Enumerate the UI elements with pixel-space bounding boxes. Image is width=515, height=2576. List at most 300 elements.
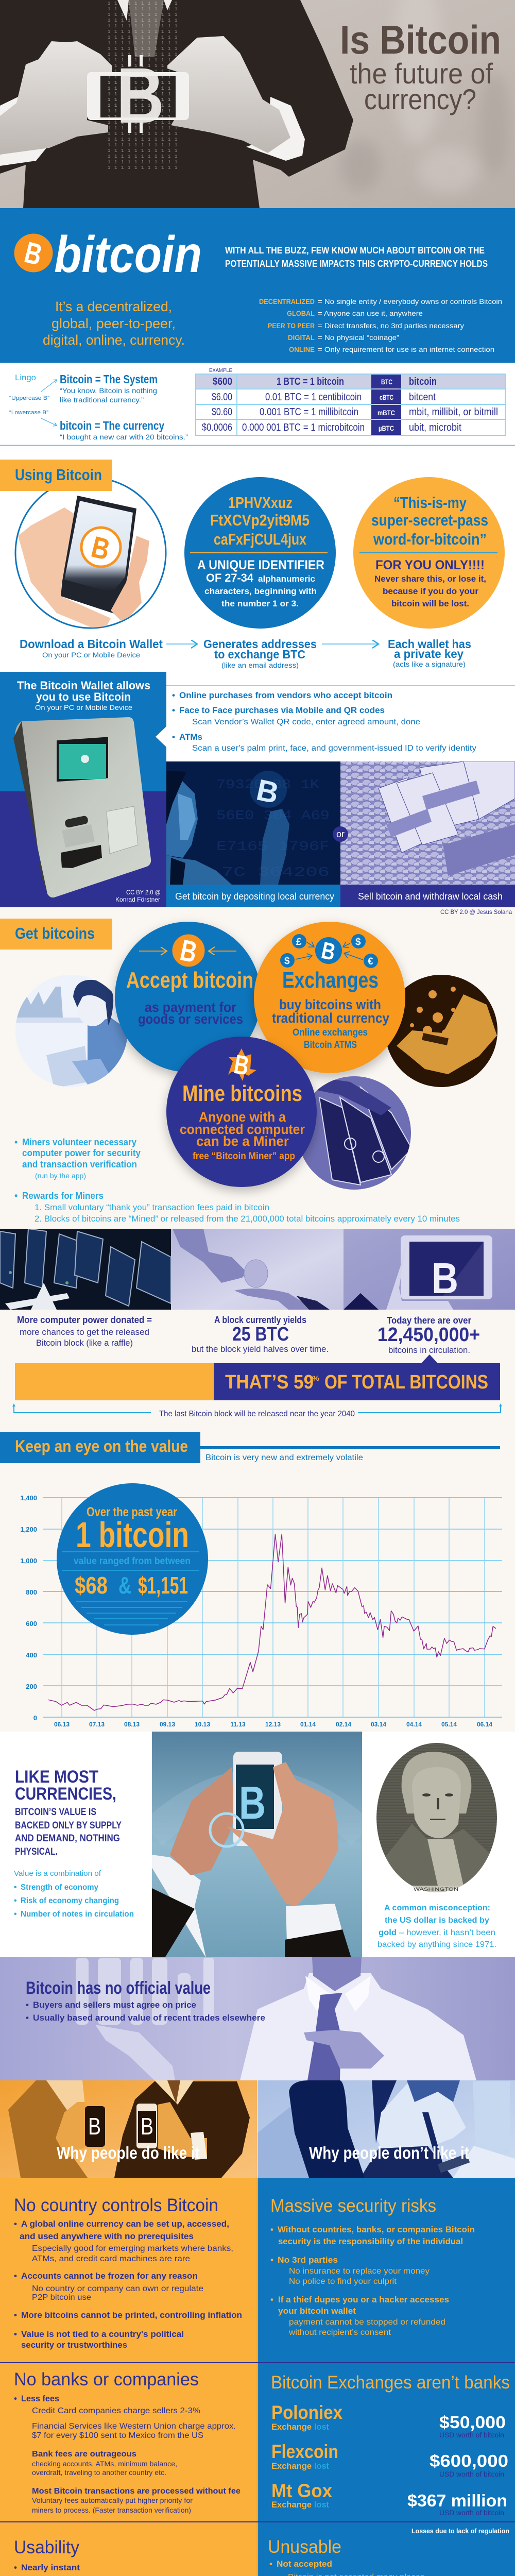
- section heading: get bitcoins: [0, 919, 112, 950]
- photo: tablet with bitcoin: [344, 1229, 515, 1310]
- caption: withdraw: Sell bitcoin and withdraw local cash: [358, 891, 503, 902]
- line chart: bitcoin value: [20, 1494, 502, 1728]
- pro: no banks or companies: checking accounts, ATMs, minimum balance,: [32, 2460, 177, 2468]
- pro: no country controls bitcoin: P2P bitcoin use: [32, 2293, 91, 2302]
- pro: usability: Nearly instant: [21, 2563, 80, 2572]
- section heading: using bitcoin: [0, 460, 112, 491]
- con: massive security risks: If a thief dupes you or a hacker accesses: [278, 2295, 449, 2304]
- x axis labels: 02.14: [336, 1721, 351, 1728]
- definitions list: ONLINE: [289, 345, 315, 353]
- callout: value range circle: &: [118, 1572, 131, 1599]
- icon: bitcoin ATM: [13, 717, 151, 897]
- step: download wallet: [20, 637, 163, 659]
- y axis labels: 1,400: [20, 1494, 37, 1502]
- y axis labels: 1,000: [20, 1557, 37, 1565]
- con: unusable: Not accepted: [277, 2559, 332, 2569]
- icon: binary stream: [106, 0, 178, 170]
- pro: no banks or companies: [14, 2369, 241, 2514]
- step: generates addresses: [203, 637, 317, 669]
- circle text: accept bitcoin: [126, 934, 253, 1027]
- credit: ATM photo: CC BY 2.0 @: [126, 889, 161, 896]
- pro: no banks or companies: Financial Services like Western Union charge approx.: [32, 2422, 236, 2431]
- list: miners: 1. Small voluntary “thank you” transaction fees paid in bitcoin: [35, 1202, 269, 1212]
- x axis labels: 09.13: [160, 1721, 175, 1728]
- uppercase definition: [60, 372, 158, 404]
- pro: no country controls bitcoin: A global online currency can be set up, accessed,: [21, 2219, 229, 2229]
- credit: photos: CC BY 2.0 @ Jesus Solana: [440, 908, 512, 916]
- con: exchanges are not banks: lost: [314, 2422, 329, 2432]
- photo: hands with phone: [152, 1732, 362, 1958]
- pro: no banks or companies: $7 for every $100 sent to Mexico from the US: [32, 2431, 203, 2440]
- progress bar: 59 percent: %: [312, 1374, 320, 1382]
- text: computer power: more chances to get the released: [20, 1327, 149, 1337]
- con: massive security risks: •: [270, 2295, 273, 2304]
- list: no official value: Usually based around value of recent trades elsewhere: [33, 2013, 265, 2023]
- pro: no banks or companies: •: [14, 2394, 17, 2403]
- list: value factors: •: [14, 1883, 17, 1892]
- text: block yield: but the block yield halves over time.: [192, 1344, 329, 1354]
- con: massive security risks: No insurance to replace your money: [289, 2267, 430, 2276]
- panel: using bitcoin: [0, 460, 505, 669]
- circle text: exchanges: $: [284, 956, 290, 967]
- con: massive security risks: Without countries, banks, or companies Bitcoin: [278, 2225, 475, 2234]
- table: bitcoin denominations: 0.01 BTC = 1 centibitcoin: [265, 392, 362, 403]
- circle text: exchanges: Online exchanges: [293, 1027, 368, 1038]
- circle text: accept bitcoin: Accept bitcoin: [126, 968, 253, 993]
- photo: hand and coin: [171, 1229, 344, 1310]
- pro: no banks or companies: Bank fees are outrageous: [32, 2450, 136, 2459]
- y axis labels: 1,200: [20, 1526, 37, 1533]
- wallet heading: [17, 679, 150, 711]
- lowercase definition: bitcoin = The currency: [60, 419, 164, 432]
- list: no official value: Buyers and sellers must agree on price: [33, 2000, 196, 2010]
- callout: value range circle: $1,151: [138, 1572, 188, 1599]
- x axis labels: 08.13: [124, 1721, 140, 1728]
- definitions list: = No physical “coinage”: [318, 333, 399, 342]
- circle: private key: super-secret-pass: [371, 511, 488, 529]
- icon: shirt and tie: [117, 0, 172, 57]
- circle: private key: because if you do your: [383, 586, 478, 596]
- x axis labels: 11.13: [230, 1721, 246, 1728]
- icon: bitcoin logo: bitcoin: [54, 226, 202, 283]
- callout: value range circle: [57, 1483, 208, 1635]
- or badge: or: [336, 829, 345, 839]
- list: ways to use wallet: Face to Face purchases via Mobile and QR codes: [179, 705, 385, 715]
- con: exchanges are not banks: Exchange: [271, 2461, 312, 2471]
- con: massive security risks: Massive security risks: [270, 2196, 436, 2216]
- section heading: keep an eye on the value: [0, 1432, 500, 1463]
- y axis labels: 800: [26, 1588, 37, 1596]
- text: block yield: A block currently yields: [214, 1315, 306, 1325]
- text: dollar misconception: backed by anything since 1971.: [377, 1940, 496, 1949]
- list: value factors: Value is a combination of: [14, 1869, 101, 1878]
- icon: left hand: [0, 41, 112, 155]
- panel: hero photo and title: [0, 0, 515, 208]
- list: value factors: •: [14, 1910, 17, 1919]
- con: exchanges are not banks: $600,000: [430, 2451, 508, 2470]
- table: bitcoin denominations: $600: [213, 376, 232, 387]
- list: value factors: •: [14, 1896, 17, 1905]
- list: miners: •: [14, 1191, 18, 1201]
- definition tagline: It’s a decentralized,: [55, 299, 172, 314]
- circle text: mine bitcoins: can be a Miner: [196, 1133, 289, 1149]
- list: ways to use wallet: Online purchases from vendors who accept bitcoin: [179, 690, 392, 700]
- con: unusable: •: [269, 2559, 272, 2569]
- credit: ATM photo: [115, 889, 161, 903]
- table: bitcoin denominations: cBTC: [380, 393, 393, 401]
- bracket: last block: The last Bitcoin block will be released near the year 2040: [159, 1410, 355, 1418]
- list: ways to use wallet: Scan Vendor’s Wallet QR code, enter agreed amount, done: [192, 718, 420, 726]
- heading: like most currencies: LIKE MOST: [15, 1767, 98, 1787]
- con: exchanges are not banks: Poloniex: [271, 2402, 342, 2423]
- circle text: mine bitcoins: connected computer: [180, 1122, 305, 1137]
- case labels: “Lowercase B”: [9, 410, 48, 416]
- circle: address identifier: [184, 477, 336, 629]
- intro statement: [225, 245, 488, 269]
- lowercase definition: [60, 419, 188, 441]
- icon: phone with bitcoin symbol: [87, 52, 189, 140]
- con: massive security risks: No police to find your culprit: [289, 2277, 397, 2286]
- panel: blue introduction: [0, 208, 515, 363]
- circle: address identifier: A UNIQUE IDENTIFIER: [197, 558, 324, 572]
- heading: like most currencies: BACKED ONLY BY SUPPLY: [15, 1820, 122, 1831]
- circle: private key: FOR YOU ONLY!!!!: [375, 558, 485, 572]
- con: exchanges are not banks: USD worth of bitcoin: [439, 2470, 504, 2478]
- photo: hands with phone: B: [239, 1777, 266, 1829]
- list: value factors: [14, 1869, 134, 1919]
- title: [340, 17, 501, 115]
- text: dollar misconception: – however, it hasn’t been: [399, 1928, 495, 1937]
- icon: shirt cuffs: [0, 97, 305, 166]
- con: exchanges are not banks: USD worth of bitcoin: [439, 2509, 504, 2517]
- circle: private key: bitcoin will be lost.: [391, 599, 469, 608]
- table: bitcoin denominations: $0.0006: [202, 422, 232, 433]
- icon: right hand: [167, 36, 290, 153]
- circle: mine bitcoins: [166, 1037, 317, 1187]
- wallet heading: you to use Bitcoin: [36, 690, 131, 703]
- con: exchanges are not banks: Exchange: [271, 2500, 312, 2510]
- definitions list: = Direct transfers, no 3rd parties necessary: [318, 321, 464, 330]
- pro: no country controls bitcoin: More bitcoins cannot be printed, controlling inflation: [21, 2310, 242, 2320]
- pro: no banks or companies: Most Bitcoin transactions are processed without fee: [32, 2487, 241, 2496]
- text: dollar misconception: gold: [379, 1928, 397, 1937]
- circle text: exchanges: traditional currency: [272, 1010, 389, 1026]
- heading: no official value: Bitcoin has no official value: [26, 1978, 211, 1998]
- circle: address identifier: OF 27-34: [206, 571, 254, 584]
- arrow: lowercase: [41, 418, 57, 426]
- text: block yield: 25 BTC: [232, 1324, 289, 1345]
- x axis labels: 06.13: [54, 1721, 70, 1728]
- definitions list: = Anyone can use it, anywhere: [318, 309, 423, 317]
- icon: phone in hand circle: [15, 478, 166, 628]
- panel: lingo: [0, 368, 515, 445]
- list: ways to use wallet: ATMs: [179, 732, 202, 742]
- definition tagline: global, peer-to-peer,: [52, 316, 176, 331]
- pro: no country controls bitcoin: security or trustworthines: [21, 2340, 127, 2350]
- table: bitcoin denominations: EXAMPLE: [209, 368, 232, 374]
- definitions list: GLOBAL: [287, 309, 315, 317]
- lowercase definition: “I bought a new car with 20 bitcoins.”: [60, 433, 188, 441]
- progress bar: 59 percent: [15, 1354, 500, 1400]
- text: computer power: Bitcoin block (like a raffle): [36, 1338, 133, 1348]
- pro: no country controls bitcoin: Especially good for emerging markets where banks,: [32, 2244, 233, 2253]
- panel: bitcoin wallet and ATM: [0, 672, 515, 907]
- list: miners: 2. Blocks of bitcoins are “Mined” or released from the 21,000,000 total bitcoins approximately every 10 minutes: [35, 1214, 460, 1224]
- circle text: exchanges: Exchanges: [282, 968, 379, 993]
- title: currency?: [364, 83, 476, 115]
- con: massive security risks: [270, 2196, 475, 2337]
- pro: no country controls bitcoin: and used anywhere with no prerequisites: [20, 2231, 194, 2241]
- photo: bitcoins and banknotes: [340, 761, 515, 885]
- photo: man with glowing bitcoin: 56E0 304 A69: [216, 808, 330, 823]
- circle: private key: [353, 477, 505, 629]
- circle text: accept bitcoin: B: [177, 934, 200, 970]
- circle: private key: Never share this, or lose it,: [374, 574, 486, 584]
- intro statement: WITH ALL THE BUZZ, FEW KNOW MUCH ABOUT BITCOIN OR THE: [225, 245, 485, 256]
- uppercase definition: like traditional currency.”: [60, 396, 144, 404]
- photo: why people do like it: [0, 2080, 257, 2178]
- step: download wallet: On your PC or Mobile Device: [42, 651, 140, 659]
- pro: no country controls bitcoin: •: [14, 2219, 17, 2229]
- photo: mining servers: [0, 1229, 171, 1310]
- table: bitcoin denominations: bitcoin: [409, 376, 437, 387]
- text: block yield: [192, 1315, 329, 1354]
- photo: why people do like it: B: [88, 2113, 101, 2140]
- step: download wallet: Download a Bitcoin Wallet: [20, 637, 163, 651]
- pro: no banks or companies: Less fees: [21, 2394, 59, 2403]
- step: generates addresses: to exchange BTC: [214, 648, 305, 661]
- table: bitcoin denominations: $0.60: [212, 406, 232, 418]
- con: exchanges are not banks: Exchange: [271, 2422, 312, 2432]
- pro: no country controls bitcoin: Value is not tied to a country's political: [21, 2329, 184, 2339]
- text: bitcoins in circulation: 12,450,000+: [377, 1324, 480, 1346]
- circle text: exchanges: B: [319, 937, 338, 965]
- con: unusable: Unusable: [268, 2537, 341, 2557]
- or badge: [333, 826, 348, 842]
- con: exchanges are not banks: Mt Gox: [271, 2480, 332, 2501]
- list: miners: [14, 1137, 460, 1224]
- pro: no country controls bitcoin: •: [14, 2310, 17, 2320]
- circle text: exchanges: £: [296, 937, 302, 947]
- con: massive security risks: security is the responsibility of the individual: [278, 2236, 463, 2246]
- photo: why people do not like it: [258, 2080, 515, 2178]
- wallet heading: On your PC or Mobile Device: [35, 703, 132, 711]
- table: bitcoin denominations: $6.00: [212, 392, 232, 403]
- caption: deposit: Get bitcoin by depositing local currency: [175, 891, 334, 902]
- y axis labels: 600: [26, 1620, 37, 1628]
- x axis labels: 12.13: [265, 1721, 281, 1728]
- progress bar: 59 percent: THAT’S 59: [225, 1371, 314, 1393]
- table: bitcoin denominations: mBTC: [377, 409, 395, 417]
- circle text: accept bitcoin: as payment for: [145, 999, 236, 1015]
- list: no official value: [26, 2000, 265, 2023]
- pro: no banks or companies: Credit Card companies charge sellers 2-3%: [32, 2406, 200, 2415]
- definitions list: [259, 297, 502, 353]
- circle: accept bitcoin: [115, 922, 261, 1072]
- x axis labels: 10.13: [195, 1721, 210, 1728]
- photo: why people do like it: B: [141, 2113, 153, 2140]
- definitions list: DIGITAL: [288, 333, 315, 342]
- progress bar: 59 percent: OF TOTAL BITCOINS: [324, 1371, 488, 1393]
- con: exchanges are not banks: USD worth of bitcoin: [439, 2431, 504, 2439]
- section heading: get bitcoins: Get bitcoins: [15, 924, 95, 942]
- list: no official value: •: [26, 2000, 29, 2010]
- pro: no country controls bitcoin: No country or company can own or regulate: [32, 2284, 203, 2293]
- list: ways to use wallet: [172, 690, 476, 753]
- pro: no country controls bitcoin: •: [14, 2329, 17, 2339]
- portrait banner: WASHINGTON: [414, 1887, 458, 1892]
- callout: value range circle: value ranged from between: [74, 1556, 191, 1567]
- icon: bitcoin logo: B: [21, 235, 45, 272]
- circle: address identifier: 1PHVXxuz: [228, 494, 293, 512]
- table: bitcoin denominations: BTC: [381, 378, 392, 386]
- pro: no banks or companies: overdraft, traveling to another country etc.: [32, 2468, 166, 2477]
- circle: address identifier: caFxFjCUL4jux: [214, 530, 307, 548]
- photo: man with glowing bitcoin: E7165 1796F: [216, 839, 330, 854]
- y axis labels: 400: [26, 1651, 37, 1659]
- callout: value range circle: $68: [75, 1572, 108, 1599]
- circle text: exchanges: [272, 934, 389, 1050]
- bracket: last block: [12, 1403, 502, 1418]
- table: bitcoin denominations: ubit, microbit: [409, 422, 461, 433]
- circle text: mine bitcoins: free “Bitcoin Miner” app: [193, 1151, 295, 1162]
- circle text: exchanges: Bitcoin ATMS: [304, 1040, 357, 1050]
- section heading: keep an eye on the value: Keep an eye on the value: [15, 1437, 188, 1455]
- lingo label: Lingo: [15, 374, 36, 382]
- text: dollar misconception: A common misconception:: [384, 1904, 490, 1912]
- pro: no banks or companies: No banks or companies: [14, 2369, 199, 2389]
- list: miners: and transaction verification: [22, 1159, 137, 1170]
- photo: hand with golden coins: [384, 974, 500, 1089]
- y axis labels: 0: [33, 1714, 37, 1722]
- list: value factors: Strength of economy: [21, 1883, 98, 1892]
- x axis labels: 01.14: [300, 1721, 316, 1728]
- photo: man with glowing bitcoin: 79326 B8 1K: [216, 777, 319, 792]
- list: no official value: •: [26, 2013, 29, 2023]
- callout: value range circle: 1 bitcoin: [76, 1515, 189, 1555]
- caption: why people do not like it: Why people don’t like it: [309, 2143, 469, 2162]
- photo: tablet with bitcoin: B: [432, 1254, 458, 1302]
- circle text: mine bitcoins: Mine bitcoins: [182, 1081, 302, 1106]
- heading: like most currencies: BITCOIN’S VALUE IS: [15, 1807, 96, 1818]
- text: bitcoins in circulation: Today there are over: [387, 1315, 471, 1326]
- table: bitcoin denominations: µBTC: [379, 424, 394, 432]
- x axis labels: 06.14: [477, 1721, 492, 1728]
- table: bitcoin denominations: 1 BTC = 1 bitcoin: [277, 376, 344, 387]
- photo: man with glowing bitcoin: [166, 761, 340, 885]
- table: bitcoin denominations: mbit, millibit, or bitmill: [409, 406, 498, 418]
- circle text: exchanges: buy bitcoins with: [279, 997, 381, 1012]
- table: bitcoin denominations: 0.001 BTC = 1 millibitcoin: [260, 406, 358, 418]
- pro: no banks or companies: Voluntary fees automatically put higher priority for: [32, 2496, 193, 2504]
- pro: no country controls bitcoin: No country controls Bitcoin: [14, 2195, 218, 2215]
- con: massive security risks: •: [270, 2225, 273, 2234]
- photo: man with tablet: [15, 974, 129, 1088]
- photo: mining keyboard: [303, 1076, 411, 1190]
- photo: man with glowing bitcoin: 7C 364206: [221, 865, 330, 880]
- circle text: exchanges: $: [355, 937, 361, 947]
- heading: like most currencies: CURRENCIES,: [15, 1784, 116, 1804]
- definitions list: = Only requirement for use is an internet connection: [318, 345, 494, 353]
- x axis labels: [54, 1721, 492, 1728]
- definition tagline: digital, online, currency.: [43, 332, 185, 348]
- con: exchanges are not banks: lost: [314, 2461, 329, 2471]
- photo: man in shirt: [0, 1957, 515, 2080]
- pro: usability: [14, 2537, 241, 2576]
- callout: value range circle: Over the past year: [87, 1505, 177, 1519]
- price line: [48, 1534, 496, 1710]
- heading: like most currencies: AND DEMAND, NOTHING: [15, 1833, 120, 1844]
- case labels: “Uppercase B”: [9, 395, 49, 401]
- uppercase definition: Bitcoin = The System: [60, 372, 158, 386]
- x axis labels: 05.14: [441, 1721, 457, 1728]
- caption: withdraw: [340, 885, 515, 907]
- icon: phone in hand circle: B: [88, 530, 113, 567]
- list: miners: Rewards for Miners: [22, 1191, 104, 1201]
- panel: get bitcoins: [0, 907, 515, 1732]
- circle text: exchanges: €: [368, 956, 373, 967]
- heading: like most currencies: [15, 1767, 122, 1857]
- arrow: uppercase: [41, 380, 57, 392]
- list: miners: (run by the app): [35, 1172, 86, 1180]
- circle: address identifier: characters, beginning with: [204, 586, 317, 596]
- text: bitcoins in circulation: [377, 1315, 480, 1355]
- x axis labels: 07.13: [89, 1721, 105, 1728]
- pro: usability: •: [14, 2563, 17, 2572]
- con: exchanges are not banks: [271, 2372, 510, 2535]
- section heading: using bitcoin: Using Bitcoin: [15, 466, 102, 484]
- con: exchanges are not banks: Bitcoin Exchanges aren’t banks: [271, 2372, 510, 2393]
- circle: address identifier: the number 1 or 3.: [221, 599, 299, 608]
- con: exchanges are not banks: Flexcoin: [271, 2441, 338, 2462]
- pro: no country controls bitcoin: [14, 2195, 242, 2350]
- definitions list: = No single entity / everybody owns or controls Bitcoin: [318, 297, 502, 306]
- con: massive security risks: No 3rd parties: [278, 2255, 338, 2265]
- icon: George Washington portrait: [376, 1743, 497, 1896]
- step: private key: a private key: [394, 647, 464, 660]
- case labels: [9, 395, 49, 416]
- text: bitcoins in circulation: bitcoins in circulation.: [388, 1345, 470, 1355]
- pro: no country controls bitcoin: Accounts cannot be frozen for any reason: [21, 2271, 198, 2281]
- panel: pros column: [0, 2178, 257, 2576]
- table: bitcoin denominations: bitcent: [409, 392, 436, 403]
- con: exchanges are not banks: $50,000: [439, 2413, 506, 2432]
- circle: address identifier: alphanumeric: [258, 574, 315, 584]
- con: exchanges are not banks: lost: [314, 2500, 329, 2510]
- caption: why people do like it: Why people do like it: [57, 2143, 200, 2162]
- circle text: mine bitcoins: Anyone with a: [199, 1109, 286, 1125]
- icon: phone with bitcoin symbol: B: [116, 52, 164, 140]
- list: miners: •: [14, 1137, 18, 1147]
- circle: private key: word-for-bitcoin”: [373, 530, 487, 548]
- x axis labels: 04.14: [406, 1721, 422, 1728]
- arrow: to private key: [322, 643, 379, 645]
- circle: address identifier: FtXCVp2yit9M5: [210, 511, 310, 529]
- list: value factors: Risk of economy changing: [21, 1896, 119, 1905]
- table: bitcoin denominations: 0.000 001 BTC = 1 microbitcoin: [242, 422, 365, 433]
- x axis labels: 03.14: [371, 1721, 386, 1728]
- pro: usability: Usability: [14, 2537, 79, 2557]
- section heading: keep an eye on the value: Bitcoin is very new and extremely volatile: [205, 1453, 363, 1462]
- text: dollar misconception: the US dollar is backed by: [385, 1916, 489, 1925]
- con: massive security risks: without recipient’s consent: [288, 2328, 391, 2337]
- icon: suit: [0, 0, 353, 208]
- definitions list: PEER TO PEER: [268, 321, 315, 330]
- con: unusable: [268, 2537, 478, 2576]
- list: ways to use wallet: Scan a user's palm print, face, and government-issued ID to verify identity: [192, 744, 476, 753]
- list: miners: computer power for security: [22, 1148, 141, 1158]
- title: the future of: [350, 57, 493, 90]
